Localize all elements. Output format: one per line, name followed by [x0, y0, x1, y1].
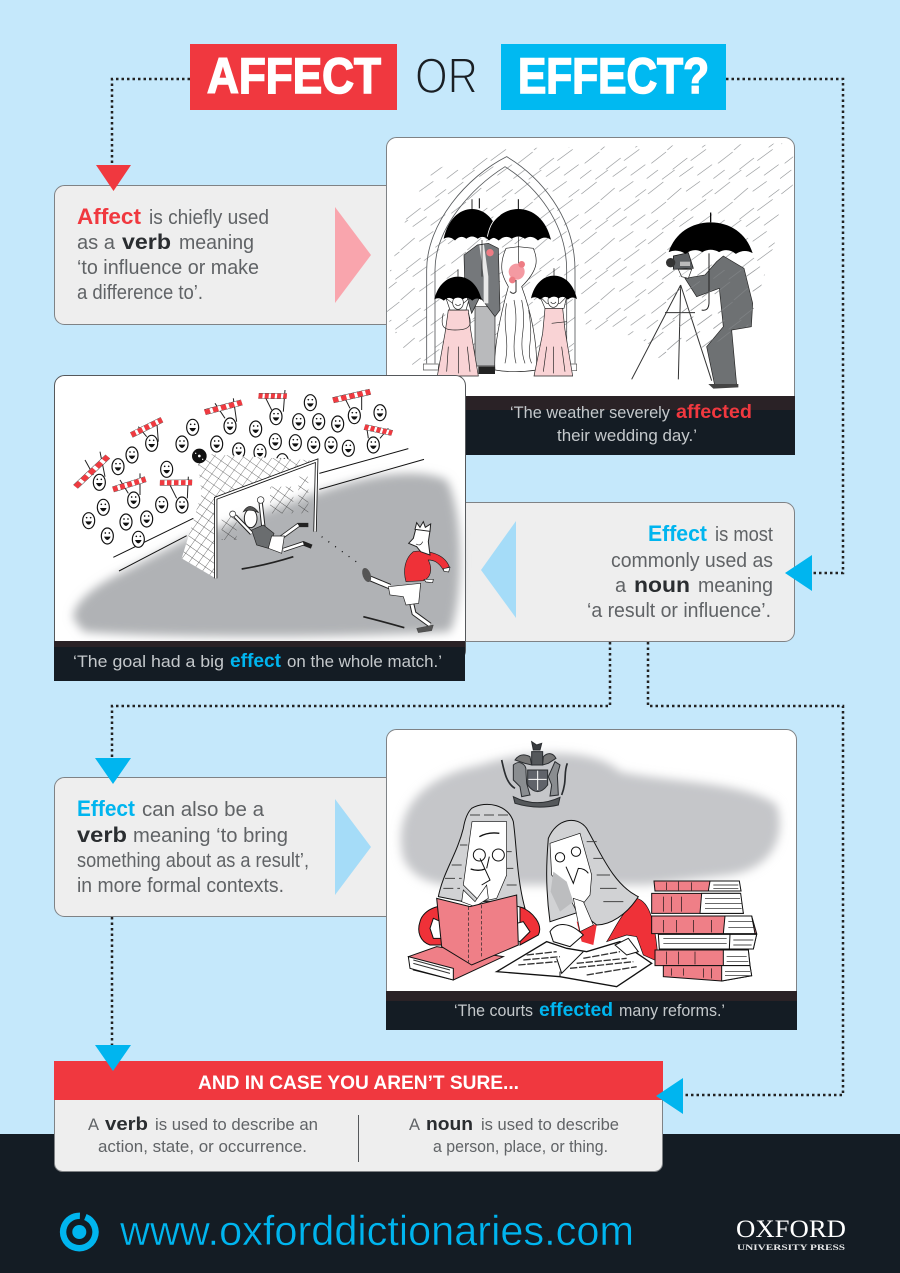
arrow: blue down, verb panel: [95, 758, 131, 784]
goal net: [182, 453, 317, 578]
title word: or: OR: [415, 48, 478, 104]
noun note: is used to describe: [481, 1116, 619, 1134]
title box: effect: EFFECT?: [518, 48, 709, 104]
stack of books: [652, 881, 757, 981]
caption: courts: effected: [539, 1000, 613, 1021]
raised arms: [85, 390, 388, 498]
definition text: ‘to influence or make: [77, 257, 259, 279]
summary header: [54, 1061, 663, 1100]
royal crest: [502, 742, 567, 807]
caption: wedding: ‘The weather severely: [510, 403, 670, 422]
footer url: www.oxforddictionaries.com: [119, 1207, 634, 1254]
definition text: something about as a result’,: [77, 850, 309, 872]
goalkeeper: [230, 497, 312, 553]
definition text: a: [615, 575, 627, 597]
panel: summary box: [54, 1061, 663, 1172]
arrow: pink right: [335, 207, 371, 303]
arrow: blue down, summary: [95, 1045, 131, 1071]
kicker: [360, 522, 450, 633]
panel: wedding illustration: [386, 138, 795, 455]
caption: wedding: [386, 396, 795, 455]
judge right: [547, 820, 658, 962]
definition text: Effect: [648, 521, 708, 546]
illustration: judges: [401, 742, 780, 987]
caption: courts: many reforms.’: [619, 1001, 725, 1020]
caption: wedding: affected: [676, 402, 752, 423]
illustration: wedding in the rain: [387, 143, 793, 389]
tripod: [632, 285, 712, 381]
bridesmaid left: [434, 269, 482, 376]
panel: courts illustration: [386, 730, 797, 1030]
photographer: [663, 213, 763, 389]
arrow: light blue left: [481, 521, 516, 618]
open red book: [437, 895, 518, 965]
definition text: meaning: [698, 575, 773, 597]
definition text: as a: [77, 232, 116, 254]
arrow: light blue right: [335, 799, 371, 895]
panel: football illustration: [54, 376, 466, 681]
caption: football: ‘The goal had a big: [73, 652, 224, 671]
arrow: red down: [96, 165, 131, 191]
dotted connector: verb panel to summary box: [111, 917, 113, 1046]
arrow: blue left, summary: [656, 1078, 683, 1114]
panel: effect verb definition: [54, 778, 400, 916]
panel: effect noun definition: [440, 502, 794, 642]
stand lines: [113, 449, 424, 571]
title box: affect: AFFECT: [207, 48, 381, 104]
verb note: A: [88, 1116, 99, 1134]
open large book: [497, 938, 652, 987]
definition text: commonly used as: [611, 550, 773, 572]
definition text: verb: [77, 824, 127, 847]
dotted connector: noun panel to summary box: [648, 642, 843, 1095]
oxford university press logo: OXFORD: [736, 1216, 846, 1243]
definition text: in more formal contexts.: [77, 875, 284, 897]
definition text: meaning: [179, 232, 254, 254]
pitch shading: [73, 473, 460, 637]
definition text: meaning ‘to bring: [133, 825, 288, 847]
ball trail: [322, 537, 358, 563]
verb note: verb: [105, 1114, 148, 1134]
summary header: AND IN CASE YOU AREN’T SURE...: [198, 1073, 519, 1094]
caption: courts: ‘The courts: [454, 1001, 533, 1020]
ball: [192, 449, 207, 463]
wall shading: [401, 753, 780, 885]
definition text: Effect: [77, 796, 136, 821]
verb note: is used to describe an: [155, 1116, 318, 1134]
groom: [464, 240, 500, 374]
illustration: goal scored: [71, 388, 460, 637]
bride: [495, 237, 537, 372]
definition text: is chiefly used: [149, 207, 269, 229]
ground shadows: [242, 557, 404, 628]
panel: affect definition: [54, 186, 400, 324]
definition text: can also be a: [142, 799, 265, 821]
umbrellas: couple: [444, 199, 500, 240]
noun note: noun: [426, 1114, 473, 1134]
footer band: [0, 1134, 900, 1273]
definition text: verb: [122, 231, 171, 254]
title: [190, 44, 726, 110]
caption: courts: [386, 991, 797, 1030]
dotted connector: title to effect noun panel: [726, 79, 843, 573]
definition text: noun: [634, 574, 690, 597]
hands on book: [430, 918, 530, 942]
oxford university press logo: UNIVERSITY PRESS: [737, 1242, 845, 1252]
arrow: blue left: [785, 555, 812, 591]
footer logo icon: [58, 1211, 100, 1253]
verb note: action, state, or occurrence.: [98, 1138, 307, 1156]
caption: football: on the whole match.’: [287, 652, 442, 671]
definition text: ‘a result or influence’.: [587, 600, 771, 622]
caption: wedding: their wedding day.’: [557, 426, 697, 445]
book under: [408, 947, 503, 980]
crowd faces: [83, 395, 386, 547]
dotted connector: noun panel to verb panel: [112, 642, 610, 760]
definition text: is most: [715, 524, 773, 546]
caption: football: [54, 641, 465, 681]
church arch: [427, 157, 575, 363]
bridesmaid right: [531, 268, 577, 376]
caption: football: effect: [230, 651, 282, 672]
judge left: [419, 804, 540, 945]
definition text: Affect: [77, 204, 142, 229]
definition text: a difference to’.: [77, 282, 203, 304]
noun note: A: [409, 1116, 420, 1134]
dotted connector: title to first panel: [112, 79, 190, 166]
noun note: a person, place, or thing.: [433, 1138, 608, 1156]
scarves: [71, 388, 392, 491]
